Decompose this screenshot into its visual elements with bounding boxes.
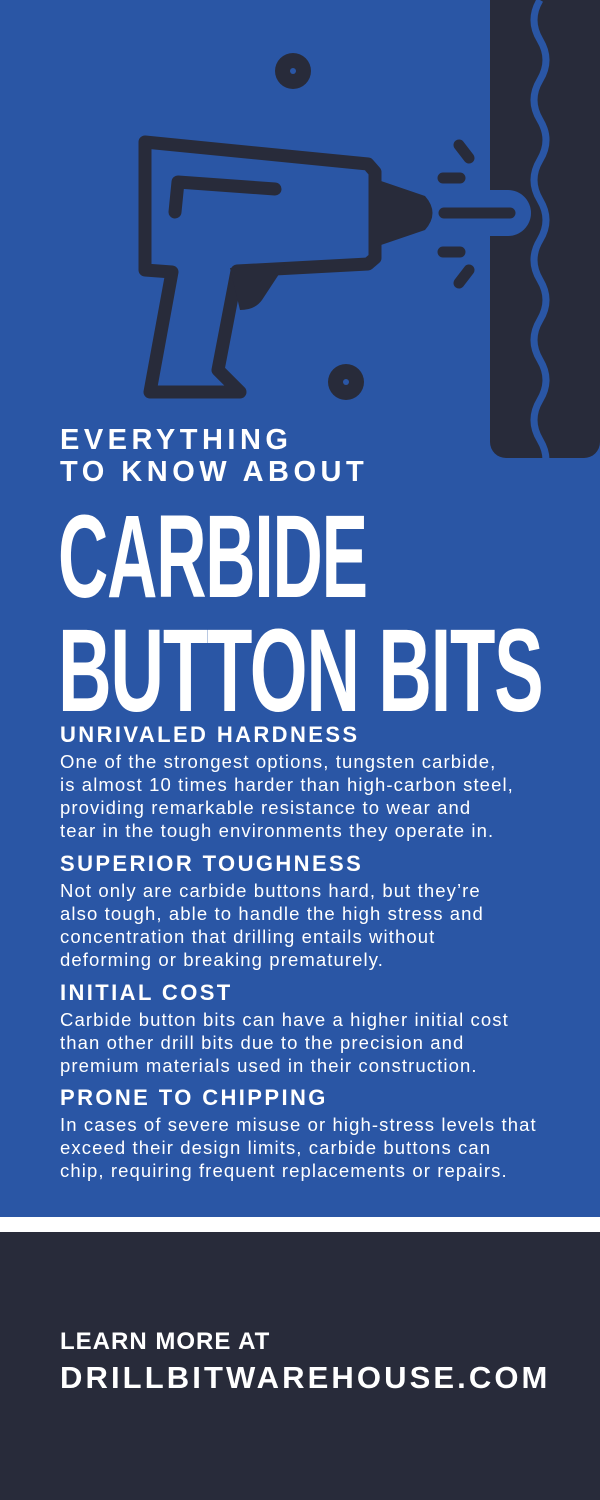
section: toughness: SUPERIOR TOUGHNESS <box>60 851 363 876</box>
section: hardness <box>60 722 514 841</box>
title: BUTTON BITS <box>58 605 542 737</box>
footer text: LEARN MORE AT <box>60 1328 270 1355</box>
section: hardness: is almost 10 times harder than high-carbon steel, <box>60 774 514 795</box>
dots <box>275 53 364 400</box>
section: toughness: deforming or breaking prematurely. <box>60 949 384 970</box>
section: chipping: exceed their design limits, carbide buttons can <box>60 1137 491 1158</box>
section: toughness: also tough, able to handle the high stress and <box>60 903 484 924</box>
illustration: drill into wall <box>138 0 600 458</box>
footer: DRILLBITWAREHOUSE.COM <box>60 1360 550 1395</box>
wall <box>490 0 600 480</box>
section: hardness: UNRIVALED HARDNESS <box>60 722 359 747</box>
title <box>58 424 542 737</box>
title: EVERYTHING <box>60 424 292 456</box>
section: cost <box>60 980 509 1076</box>
section: hardness: providing remarkable resistance to wear and <box>60 797 471 818</box>
section: chipping: chip, requiring frequent replacements or repairs. <box>60 1160 508 1181</box>
section: cost: than other drill bits due to the precision and <box>60 1032 464 1053</box>
section: toughness <box>60 851 484 970</box>
section: hardness: tear in the tough environments they operate in. <box>60 820 494 841</box>
section: chipping <box>60 1085 537 1181</box>
section: toughness: concentration that drilling entails without <box>60 926 435 947</box>
title: TO KNOW ABOUT <box>60 456 368 488</box>
section: cost: INITIAL COST <box>60 980 233 1005</box>
drill nose and grip fill <box>230 180 432 310</box>
section: hardness: One of the strongest options, tungsten carbide, <box>60 751 496 772</box>
title: CARBIDE <box>58 491 367 623</box>
section: chipping: PRONE TO CHIPPING <box>60 1085 328 1110</box>
section: cost: premium materials used in their construction. <box>60 1055 478 1076</box>
section: cost: Carbide button bits can have a higher initial cost <box>60 1009 509 1030</box>
footer <box>0 1217 600 1500</box>
section: chipping: In cases of severe misuse or high-stress levels that <box>60 1114 537 1135</box>
drill <box>145 142 510 392</box>
section: toughness: Not only are carbide buttons hard, but they’re <box>60 880 481 901</box>
